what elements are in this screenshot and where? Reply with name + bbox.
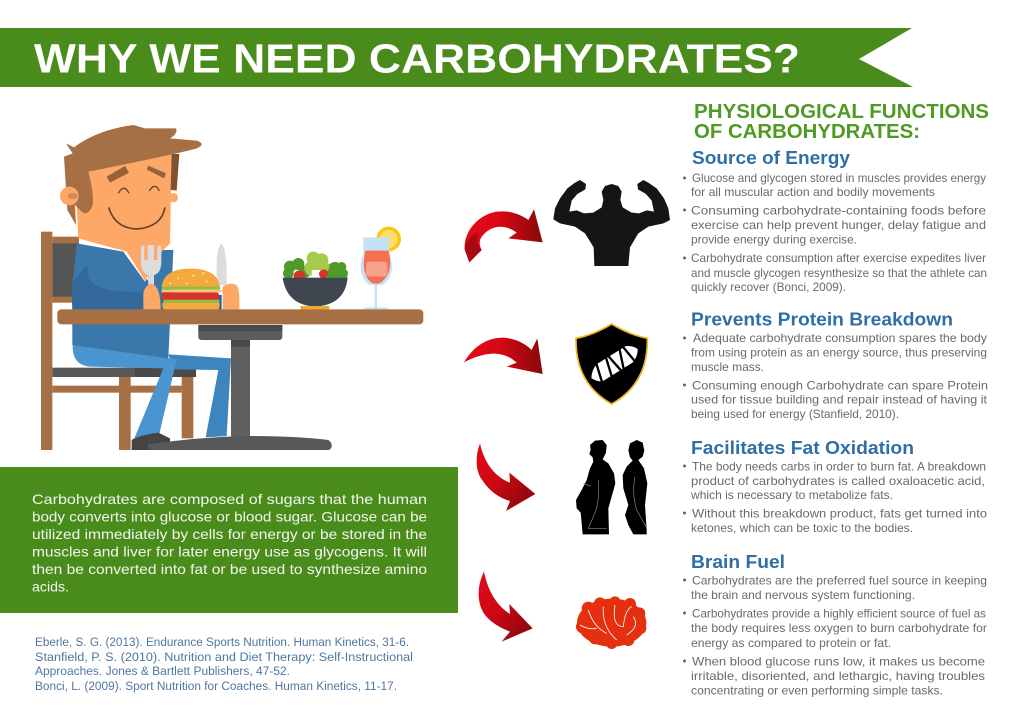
panel: intro text xyxy=(0,467,458,613)
section: facilitates fat oxidation: The body needs carbs in order to burn fat. A breakdown xyxy=(692,460,986,474)
references: Bonci, L. (2009). Sport Nutrition for Coaches. Human Kinetics, 11-17. xyxy=(35,679,397,693)
illustration: man eating at table xyxy=(41,125,423,450)
heading: physiological functions: PHYSIOLOGICAL FUNCTIONS xyxy=(694,101,989,123)
arrow: to brain xyxy=(479,572,533,642)
panel: intro text: muscles and liver for later energy use as glycogens. It will xyxy=(32,544,427,560)
section: brain fuel: Carbohydrates provide a highly efficient source of fuel as xyxy=(692,606,986,620)
section: prevents protein breakdown: Consuming enough Carbohydrate can spare Protein xyxy=(692,378,988,392)
panel: intro text: Carbohydrates are composed of sugars that the human xyxy=(32,491,427,507)
heading: physiological functions: OF CARBOHYDRATES: xyxy=(694,121,920,143)
section: brain fuel: the body requires less oxygen to burn carbohydrate for xyxy=(691,621,987,635)
section: source of energy: exercise can help prevent hunger, delay fatigue and xyxy=(691,218,986,232)
heading: physiological functions xyxy=(694,101,989,143)
panel: intro text: body converts into glucose or blood sugar. Glucose can be xyxy=(32,508,427,524)
section: prevents protein breakdown: Prevents Protein Breakdown xyxy=(691,310,953,330)
panel: intro text: utilized immediately by cells for energy or be stored in the xyxy=(32,526,427,542)
section: brain fuel: Brain Fuel xyxy=(691,552,785,572)
section: brain fuel: energy as compared to protein or fat. xyxy=(691,636,891,650)
section: prevents protein breakdown: from using protein as an energy source, thus preserving xyxy=(691,346,987,360)
man torso xyxy=(72,243,173,358)
section: brain fuel: concentrating or even performing simple tasks. xyxy=(691,684,943,698)
panel: intro text: then be converted into fat or be used to synthesize amino xyxy=(32,561,427,577)
section: prevents protein breakdown: muscle mass. xyxy=(691,360,764,374)
icon: protein shield xyxy=(576,324,647,404)
section: source of energy xyxy=(683,148,987,294)
table base xyxy=(198,325,282,438)
section: prevents protein breakdown: Adequate carbohydrate consumption spares the body xyxy=(693,331,987,345)
section: source of energy: provide energy during exercise. xyxy=(691,232,857,246)
section: facilitates fat oxidation: Facilitates Fat Oxidation xyxy=(691,438,914,458)
section: facilitates fat oxidation xyxy=(683,438,987,535)
references: Stanfield, P. S. (2010). Nutrition and Diet Therapy: Self-Instructional xyxy=(35,650,413,664)
section: facilitates fat oxidation: which is necessary to metabolize fats. xyxy=(690,488,893,502)
section: brain fuel xyxy=(683,552,987,698)
arrow: to shield xyxy=(464,338,543,374)
cocktail xyxy=(361,227,401,310)
section: prevents protein breakdown xyxy=(683,310,988,421)
icon: muscular torso xyxy=(553,180,670,266)
section: source of energy: Consuming carbohydrate-containing foods before xyxy=(691,204,986,218)
chair xyxy=(41,232,196,450)
icon: brain xyxy=(576,596,646,649)
man legs xyxy=(73,344,332,450)
section: source of energy: Source of Energy xyxy=(692,148,850,168)
references: Approaches. Jones & Bartlett Publishers, 47-52. xyxy=(35,664,290,678)
section: source of energy: quickly recover (Bonci, 2009). xyxy=(691,280,846,294)
references xyxy=(35,635,413,693)
hands xyxy=(143,283,239,309)
table top xyxy=(57,309,423,324)
arrow: to muscles xyxy=(465,209,543,262)
fork and knife xyxy=(141,243,227,285)
salad bowl xyxy=(283,252,348,310)
section: source of energy: for all muscular action and bodily movements xyxy=(691,185,935,199)
section: facilitates fat oxidation: Without this breakdown product, fats get turned into xyxy=(692,506,987,520)
icon: fat and lean silhouettes xyxy=(576,440,647,534)
panel: intro text: acids. xyxy=(32,578,69,594)
section: brain fuel: the brain and nervous system functioning. xyxy=(691,588,915,602)
title: WHY WE NEED CARBOHYDRATES? xyxy=(34,36,800,82)
burger xyxy=(162,269,222,311)
section: prevents protein breakdown: used for tissue building and repair instead of having it xyxy=(691,392,988,406)
section: prevents protein breakdown: being used for energy (Stanfield, 2010). xyxy=(691,407,899,421)
references: Eberle, S. G. (2013). Endurance Sports Nutrition. Human Kinetics, 31-6. xyxy=(35,635,409,649)
man head xyxy=(60,125,202,281)
section: brain fuel: Carbohydrates are the preferred fuel source in keeping xyxy=(692,574,987,588)
title banner xyxy=(0,28,913,87)
arrow: to body shapes xyxy=(477,443,535,511)
section: facilitates fat oxidation: product of carbohydrates is called oxaloacetic acid, xyxy=(691,474,985,488)
section: source of energy: Carbohydrate consumption after exercise expedites liver xyxy=(691,251,986,265)
section: source of energy: Glucose and glycogen stored in muscles provides energy xyxy=(692,171,986,185)
section: brain fuel: When blood glucose runs low, it makes us become xyxy=(692,654,985,668)
section: brain fuel: irritable, disoriented, and lethargic, having troubles xyxy=(691,669,985,683)
section: source of energy: and muscle glycogen resynthesize so that the athlete can xyxy=(691,266,987,280)
section: facilitates fat oxidation: ketones, which can be toxic to the bodies. xyxy=(691,521,913,535)
